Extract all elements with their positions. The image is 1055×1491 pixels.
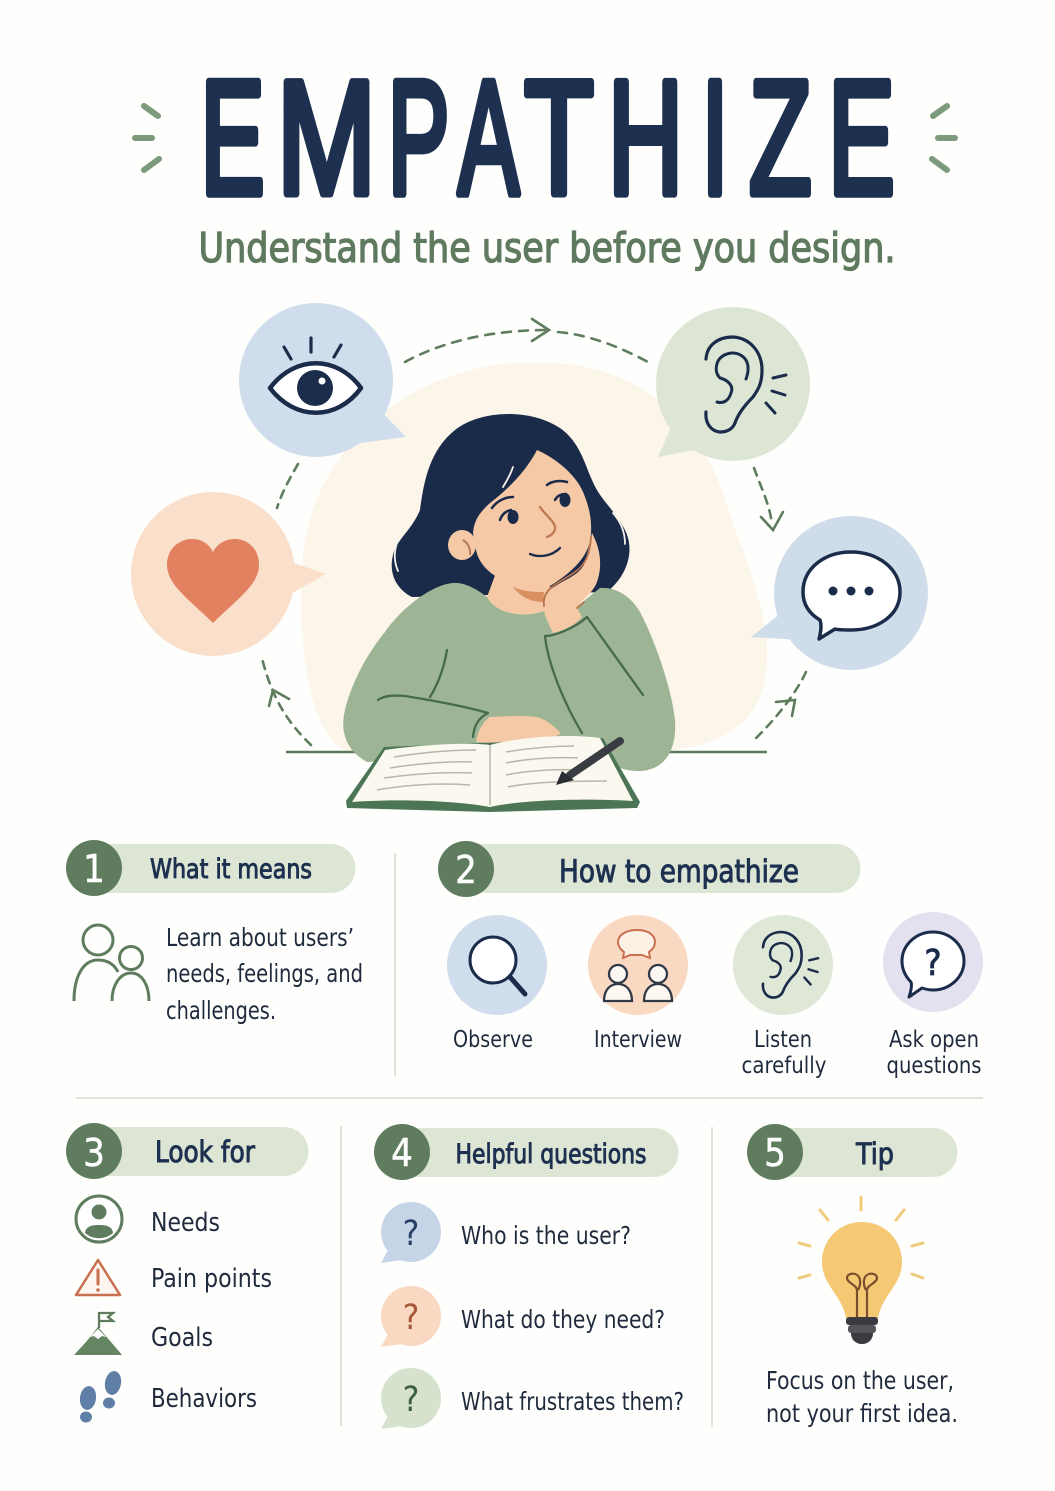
neck — [487, 570, 560, 614]
list: look for: Pain points — [151, 1264, 272, 1294]
text: definition: needs, feelings, and — [166, 959, 363, 988]
title: I — [702, 48, 729, 229]
section 1 header: 1 — [83, 847, 105, 891]
sleeve lines — [378, 617, 643, 737]
question 2 — [381, 1286, 665, 1347]
title — [201, 46, 895, 229]
item: observe: Observe — [453, 1027, 533, 1053]
neck shadow — [513, 587, 544, 602]
icon: needs — [76, 1196, 122, 1242]
section 1 header — [66, 840, 355, 896]
question 1 — [381, 1202, 631, 1263]
item: ask open questions — [883, 912, 983, 1079]
list: look for — [74, 1196, 272, 1422]
item: observe — [447, 915, 547, 1053]
title: E — [828, 48, 895, 228]
question 2: ? — [403, 1298, 419, 1338]
item: listen carefully — [733, 915, 833, 1079]
question 3: What frustrates them? — [461, 1387, 684, 1416]
item: ask open questions: questions — [886, 1053, 982, 1079]
cycle arrows — [262, 319, 806, 745]
text: tip: not your first idea. — [766, 1399, 958, 1428]
item: interview — [588, 915, 688, 1053]
hair — [392, 414, 629, 597]
text: definition — [166, 923, 363, 1025]
list: look for: Needs — [151, 1208, 220, 1238]
icon: users — [74, 925, 149, 1001]
section 2 header — [438, 841, 860, 897]
sweater — [343, 583, 675, 771]
bubble: speech — [751, 516, 928, 670]
question 2: What do they need? — [461, 1305, 665, 1334]
section 2 header: 2 — [455, 848, 477, 892]
nose and mouth — [530, 507, 560, 556]
section 5 header: Tip — [855, 1137, 894, 1171]
title: M — [277, 48, 376, 229]
icon: pain points — [76, 1260, 120, 1295]
hair highlights — [395, 467, 625, 571]
question 1: ? — [403, 1214, 419, 1254]
title: T — [524, 47, 594, 228]
title: A — [458, 47, 519, 228]
item: interview: Interview — [594, 1027, 682, 1053]
section 3 header: 3 — [83, 1131, 105, 1175]
text: definition: challenges. — [166, 996, 276, 1025]
eyes and brows — [492, 481, 570, 524]
question 1: Who is the user? — [461, 1221, 631, 1250]
icon: behaviors — [78, 1370, 123, 1422]
hand outline — [544, 537, 591, 608]
resting hand — [476, 716, 561, 745]
list: look for: Behaviors — [151, 1384, 257, 1414]
section 3 header — [66, 1123, 308, 1179]
title: H — [608, 47, 683, 228]
section 4 header: 4 — [391, 1131, 413, 1175]
section 1 header: What it means — [150, 854, 312, 885]
item: ask open questions: Ask open — [889, 1027, 979, 1053]
item: ask open questions: ? — [924, 943, 942, 984]
question 3 — [381, 1368, 684, 1429]
section 5 header: 5 — [764, 1131, 786, 1175]
hand on cheek — [544, 533, 600, 633]
face — [473, 450, 591, 592]
subtitle: Understand the user before you design. — [198, 224, 896, 272]
bubble: eye — [239, 303, 406, 457]
item: listen carefully: carefully — [742, 1053, 826, 1079]
question 3: ? — [403, 1380, 419, 1420]
text: tip — [766, 1366, 958, 1428]
icon: left sparkle marks — [135, 106, 159, 170]
text: tip: Focus on the user, — [766, 1366, 954, 1395]
section 4 header — [374, 1124, 678, 1180]
section 5 header — [747, 1124, 957, 1180]
icon: right sparkle marks — [932, 106, 955, 170]
bubble: heart — [131, 492, 326, 656]
bubble: ear — [656, 307, 810, 461]
section 3 header: Look for — [155, 1135, 255, 1169]
icon: goals — [74, 1313, 122, 1355]
title: P — [388, 47, 449, 228]
text: definition: Learn about users’ — [166, 923, 354, 952]
illustration: central person — [286, 362, 767, 812]
section 4 header: Helpful questions — [456, 1139, 646, 1170]
list: look for: Goals — [151, 1323, 213, 1353]
title: E — [201, 47, 265, 229]
item: listen carefully: Listen — [754, 1027, 812, 1053]
ear — [448, 530, 476, 560]
pen — [556, 741, 620, 785]
section 2 header: How to empathize — [559, 854, 799, 890]
title: Z — [749, 46, 812, 228]
icon: light bulb — [799, 1197, 923, 1344]
book — [346, 738, 640, 812]
